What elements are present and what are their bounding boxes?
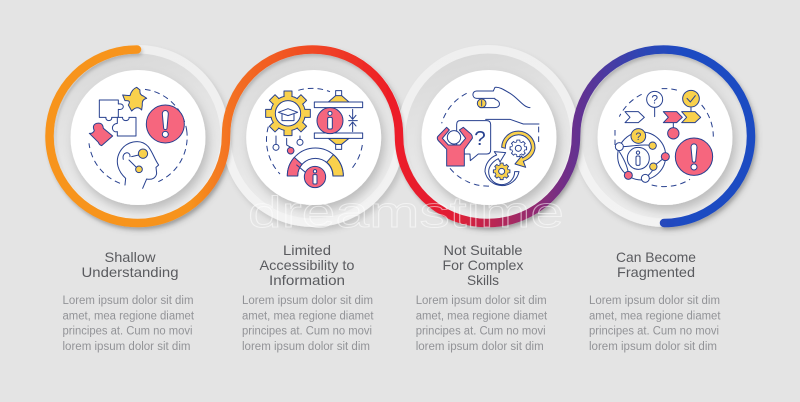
body text: amet, mea regione diamet (62, 310, 195, 322)
body text: principes at. Cum no movi (589, 326, 719, 338)
body text: amet, mea regione diamet (242, 310, 374, 322)
heading: Not Suitable (444, 242, 523, 258)
panel: limited accessibility (242, 88, 374, 353)
icon: hand, confused person and gears: ? (474, 127, 486, 150)
icon: chevrons, network and alert: ? (651, 93, 658, 107)
watermark: dreamstime (248, 188, 564, 237)
body text: principes at. Cum no movi (242, 326, 372, 338)
panel: can become fragmented (589, 89, 721, 353)
heading: For Complex (442, 257, 524, 273)
body text: Lorem ipsum dolor sit dim (589, 295, 720, 307)
heading: Fragmented (617, 264, 695, 280)
panel: not suitable for complex skills (416, 87, 548, 353)
heading: Shallow (104, 249, 156, 265)
heading: Can Become (616, 249, 696, 265)
body text (589, 295, 721, 353)
body text: lorem ipsum dolor sit dim (242, 341, 370, 353)
watermark (248, 174, 564, 237)
heading: Information (269, 272, 345, 288)
body text: lorem ipsum dolor sit dim (589, 341, 717, 353)
body text: Lorem ipsum dolor sit dim (416, 295, 547, 307)
heading (442, 242, 524, 288)
icon: gear, press and gauge (266, 88, 363, 188)
heading: Skills (467, 272, 499, 288)
heading: Understanding (82, 264, 178, 280)
panel: shallow understanding (62, 87, 195, 353)
body text: amet, mea regione diamet (589, 310, 721, 322)
body text: lorem ipsum dolor sit dim (62, 341, 190, 353)
body text: Lorem ipsum dolor sit dim (62, 295, 194, 307)
body text: principes at. Cum no movi (416, 326, 546, 338)
heading (82, 249, 178, 280)
icon: puzzle, alert and head (89, 87, 187, 188)
body text: Lorem ipsum dolor sit dim (242, 295, 373, 307)
icon: chevrons, network and alert (615, 89, 713, 187)
body text (62, 295, 195, 353)
heading: Accessibility to (260, 257, 355, 273)
circular plates (47, 45, 755, 227)
heading (616, 249, 696, 280)
icon: hand, confused person and gears (437, 87, 539, 186)
icon: chevrons, network and alert: ? (635, 131, 641, 143)
heading: Limited (283, 242, 331, 258)
body text (416, 295, 548, 353)
body text: amet, mea regione diamet (416, 310, 548, 322)
body text: lorem ipsum dolor sit dim (416, 341, 544, 353)
body text: principes at. Cum no movi (62, 326, 192, 338)
body text (242, 295, 374, 353)
looping gradient ribbon (50, 50, 751, 223)
heading (260, 242, 355, 288)
